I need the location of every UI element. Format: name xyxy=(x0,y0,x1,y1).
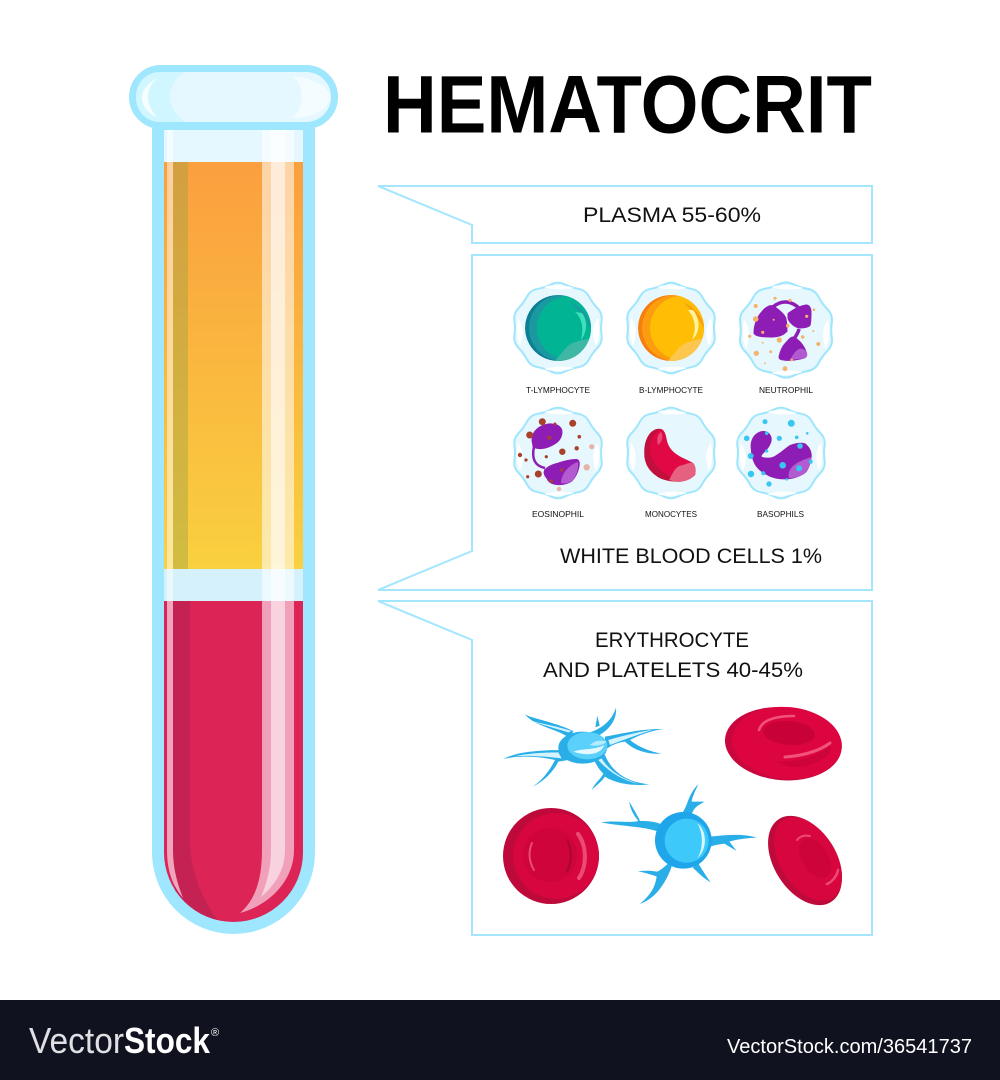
white blood cell layer xyxy=(164,569,303,601)
plasma label: PLASMA 55-60% xyxy=(583,204,761,227)
label: B-lymphocyte: B-LYMPHOCYTE xyxy=(639,385,703,395)
tube cap xyxy=(132,68,334,126)
tube glass wall xyxy=(152,128,315,934)
erythrocyte heading xyxy=(543,628,803,682)
red blood cell: right xyxy=(753,803,857,918)
cell: basophils xyxy=(737,408,825,498)
platelet: lower xyxy=(601,784,757,904)
cell: B-lymphocyte xyxy=(627,283,715,373)
red blood cell: upper right xyxy=(722,702,845,785)
cell: neutrophil xyxy=(740,282,832,378)
panel: white blood cells callout xyxy=(378,255,872,590)
label: basophils: BASOPHILS xyxy=(757,509,804,519)
erythrocyte heading: ERYTHROCYTE xyxy=(595,628,749,652)
footer bar xyxy=(0,1000,1000,1080)
plasma layer xyxy=(164,162,303,569)
cell: monocytes xyxy=(627,408,715,498)
test tube xyxy=(132,68,334,934)
label: T-lymphocyte: T-LYMPHOCYTE xyxy=(526,385,590,395)
white blood cells label: WHITE BLOOD CELLS 1% xyxy=(560,544,822,568)
title: HEMATOCRIT xyxy=(383,60,872,150)
label: neutrophil: NEUTROPHIL xyxy=(759,385,813,395)
VectorStock logo: Vector xyxy=(29,1020,124,1061)
cell: eosinophil xyxy=(514,408,602,498)
VectorStock logo: ® xyxy=(211,1027,219,1039)
erythrocyte heading: AND PLATELETS 40-45% xyxy=(543,658,803,682)
red blood cell layer xyxy=(164,601,303,930)
label: eosinophil: EOSINOPHIL xyxy=(532,509,584,519)
panel: plasma callout xyxy=(378,186,872,243)
panel: erythrocyte and platelets callout xyxy=(378,601,872,935)
VectorStock logo xyxy=(29,1020,219,1061)
tube contents xyxy=(164,128,303,930)
red blood cell: lower left xyxy=(503,808,599,904)
VectorStock logo: Stock xyxy=(124,1020,211,1061)
cell: T-lymphocyte xyxy=(514,283,602,373)
label: monocytes: MONOCYTES xyxy=(645,509,697,519)
platelet: upper xyxy=(503,708,664,790)
image id: VectorStock.com/36541737 xyxy=(727,1036,972,1058)
